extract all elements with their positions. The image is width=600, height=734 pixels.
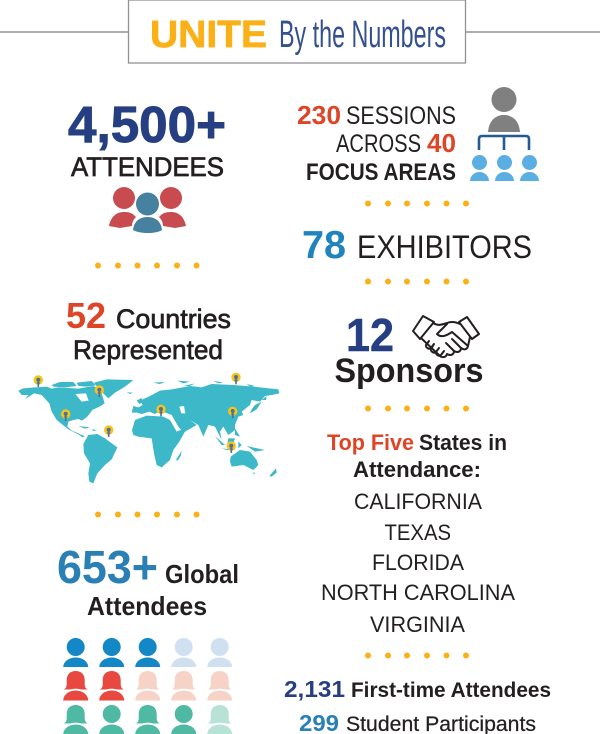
stat: 230 sessions across 40 focus areas: FOCUS AREAS — [306, 159, 456, 186]
stat: 230 sessions across 40 focus areas: ACROSS — [336, 130, 421, 158]
pictogram: global attendee demographics — [63, 638, 232, 734]
icon: session hierarchy — [470, 87, 539, 181]
stat: 4,500+ attendees: 4,500+ — [68, 96, 226, 153]
world map — [18, 373, 279, 483]
heading: top five states: Attendance: — [353, 457, 481, 482]
stat: 653+ global attendees: Global — [165, 559, 239, 589]
stat: 12 sponsors — [334, 309, 484, 390]
list: top five states: NORTH CAROLINA — [321, 580, 515, 605]
divider dots — [365, 406, 469, 412]
stat: 230 sessions across 40 focus areas: 40 — [427, 128, 456, 158]
stat: first-time attendees: First-time Attendees — [351, 679, 551, 702]
list: top five states: TEXAS — [384, 520, 451, 545]
stat: 78 exhibitors: EXHIBITORS — [357, 229, 532, 265]
stat: 78 exhibitors — [302, 224, 532, 267]
stat: 12 sponsors: Sponsors — [334, 352, 484, 390]
stat: 4,500+ attendees: ATTENDEES — [71, 152, 224, 182]
stat: 230 sessions across 40 focus areas: 230 — [297, 100, 341, 130]
list: top five states: CALIFORNIA — [354, 489, 482, 514]
list: top five states: VIRGINIA — [370, 612, 465, 637]
icon: three attendees — [109, 187, 186, 233]
heading: top five states: Top Five — [327, 430, 414, 455]
stat: 230 sessions across 40 focus areas — [297, 100, 456, 186]
stat: 12 sponsors: 12 — [346, 309, 394, 361]
stat: 78 exhibitors: 78 — [302, 224, 346, 267]
heading: top five states — [327, 430, 507, 482]
stat: 52 countries represented — [66, 295, 231, 365]
title: UNITE — [150, 14, 267, 56]
stat: 52 countries represented: Represented — [73, 335, 223, 365]
stat: 653+ global attendees: Attendees — [87, 591, 207, 621]
list: top five states — [321, 489, 515, 637]
divider dots — [365, 278, 469, 284]
title — [0, 0, 600, 63]
stat: first-time attendees — [284, 676, 551, 702]
stat: 4,500+ attendees — [68, 96, 226, 182]
list: top five states: FLORIDA — [372, 550, 464, 575]
stat: 653+ global attendees — [57, 541, 239, 621]
stat: 230 sessions across 40 focus areas: SESSIONS — [346, 102, 456, 130]
icon: handshake — [413, 316, 479, 357]
divider dots — [365, 200, 469, 206]
title: By the Numbers — [279, 14, 446, 56]
stat: 653+ global attendees: 653+ — [57, 541, 158, 593]
divider dots — [95, 512, 200, 518]
heading: top five states: States in — [419, 430, 507, 455]
divider dots — [95, 262, 200, 268]
stat: 52 countries represented: 52 — [66, 295, 106, 336]
divider dots — [365, 652, 469, 658]
stat: first-time attendees: 2,131 — [284, 676, 345, 702]
stat: 52 countries represented: Countries — [116, 304, 231, 334]
